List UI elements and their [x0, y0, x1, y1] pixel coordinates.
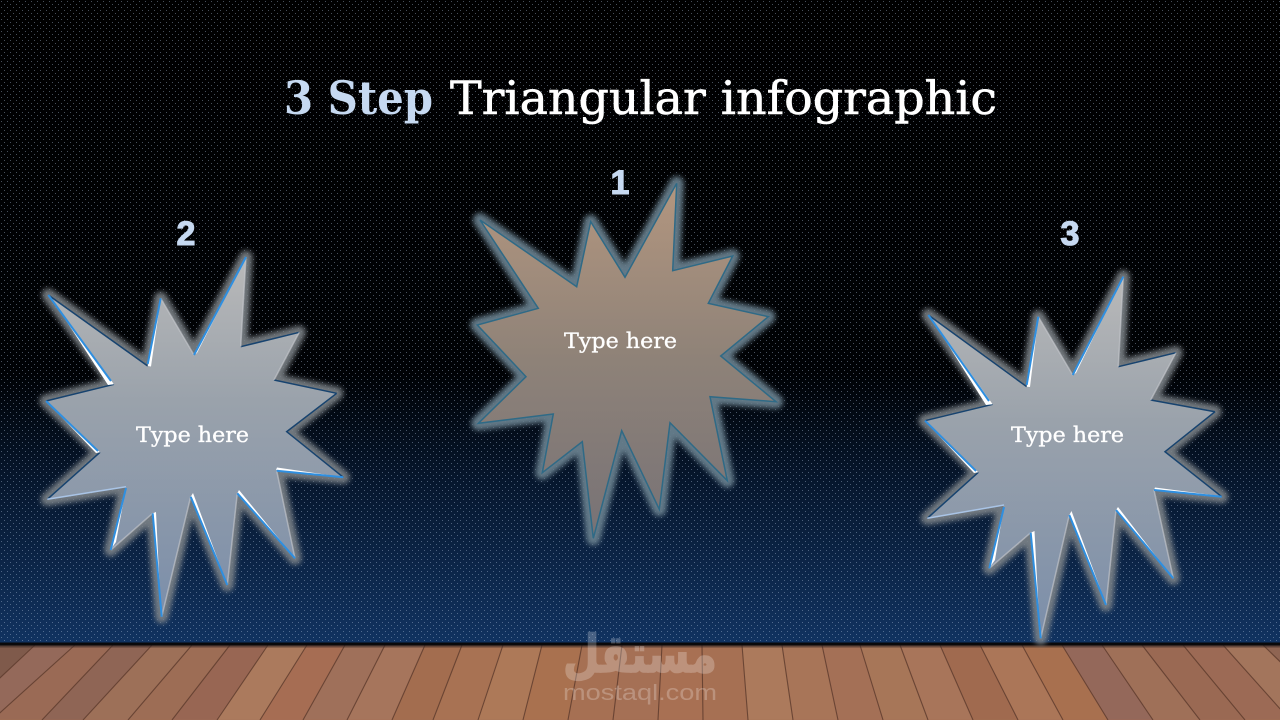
- watermark: mostaql.com: [563, 680, 717, 705]
- wooden floor: [0, 642, 1280, 720]
- step 3 number: 3: [1061, 215, 1079, 253]
- panel: step 2 starburst: Type here: [136, 423, 249, 447]
- watermark: مستقل: [563, 625, 717, 685]
- panel: step 3 starburst: Type here: [1011, 423, 1124, 447]
- watermark: [563, 625, 717, 705]
- step 1 number: 1: [611, 164, 629, 202]
- panel: step 3 starburst: [925, 277, 1222, 638]
- panel: step 2 starburst: [46, 257, 343, 617]
- title: 3 Step: [284, 71, 433, 125]
- title: Triangular infographic: [450, 71, 997, 125]
- panel: step 1 starburst: [477, 183, 776, 538]
- step 2 number: 2: [177, 215, 195, 253]
- panel: step 1 starburst: Type here: [564, 329, 677, 353]
